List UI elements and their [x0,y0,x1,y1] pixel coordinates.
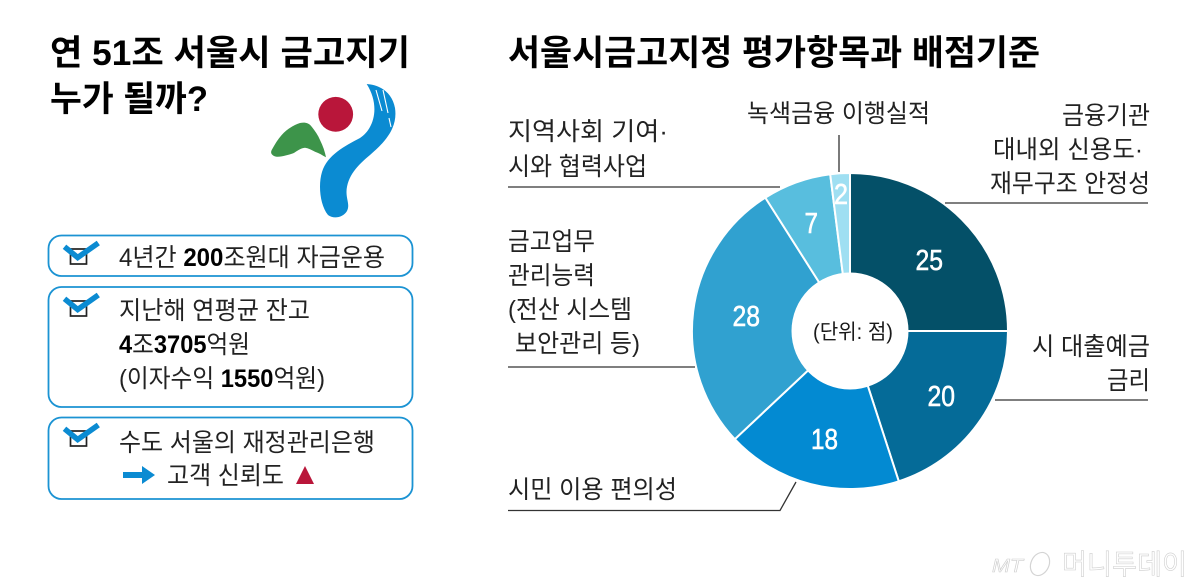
value: 18: 18 [811,424,838,456]
watermark: Money Today [992,549,1187,580]
icon: checkbox 3 [64,425,98,446]
label: financial institution credit: 재무구조 안정성 [990,170,1150,198]
segment: 28 [692,198,850,439]
label: loan and deposit rates: 시 대출예금 [1032,333,1150,361]
label: financial institution credit [945,102,1150,203]
watermark: Money Today: MT [992,556,1025,576]
label: treasury management: 관리능력 [508,262,595,290]
segment: 7 [765,174,850,331]
panel: item 2 [48,287,412,407]
label: financial institution credit: 대내외 신용도· [993,136,1143,164]
label: citizen convenience: 시민 이용 편의성 [508,476,677,504]
center hole [792,272,908,390]
icon: checkbox 1 [64,243,98,264]
text: item 2: 4조3705억원 [119,331,250,359]
label: treasury management: 금고업무 [508,228,595,256]
title: right chart heading: 서울시금고지정 평가항목과 배점기준 [508,34,1040,73]
label: treasury management: 보안관리 등) [515,330,640,358]
title: left headline: 연 51조 서울시 금고지기 [50,34,410,73]
label: loan and deposit rates [995,333,1150,400]
label: treasury management: (전산 시스템 [508,296,632,324]
watermark: Money Today: 머니투데이 [1062,549,1187,580]
donut chart [692,173,1008,489]
arrow: leads to trust [123,466,155,484]
value: 25: 25 [916,245,943,277]
title: left headline [50,34,410,119]
text: item 2: (이자수익 1550억원) [119,365,325,393]
panel: item 3 [48,418,412,499]
label: financial institution credit: 금융기관 [1062,102,1150,130]
label: loan and deposit rates: 금리 [1107,367,1150,395]
text: item 2: 지난해 연평균 잔고 [119,297,310,325]
label: community contribution [508,118,780,187]
value: 20: 20 [928,381,955,413]
icon: checkbox 2 [64,295,98,316]
text: item 1: 4년간 200조원대 자금운용 [119,244,385,272]
segment: 2 [830,173,850,331]
title: left headline: 누가 될까? [50,80,208,119]
unit label: (단위: 점) [813,321,893,344]
segment: 25 [850,173,1008,331]
segment: 18 [735,331,899,489]
icon: Seoul city logo [271,84,395,217]
text: item 2 [119,297,325,393]
segment: 20 [850,331,1008,481]
label: citizen convenience [508,476,796,510]
panel: item 1 [48,236,412,276]
text: customer trust: 고객 신뢰도 [167,462,284,490]
label: green finance: 녹색금융 이행실적 [747,100,930,128]
value: 2: 2 [834,179,848,211]
label: treasury management [508,228,695,367]
icon: up triangle [296,466,314,484]
value: 7: 7 [804,208,818,240]
label: community contribution: 지역사회 기여· [508,118,668,146]
text: item 3: 수도 서울의 재정관리은행 [119,429,375,457]
label: community contribution: 시와 협력사업 [508,153,647,181]
value: 28: 28 [732,301,760,333]
